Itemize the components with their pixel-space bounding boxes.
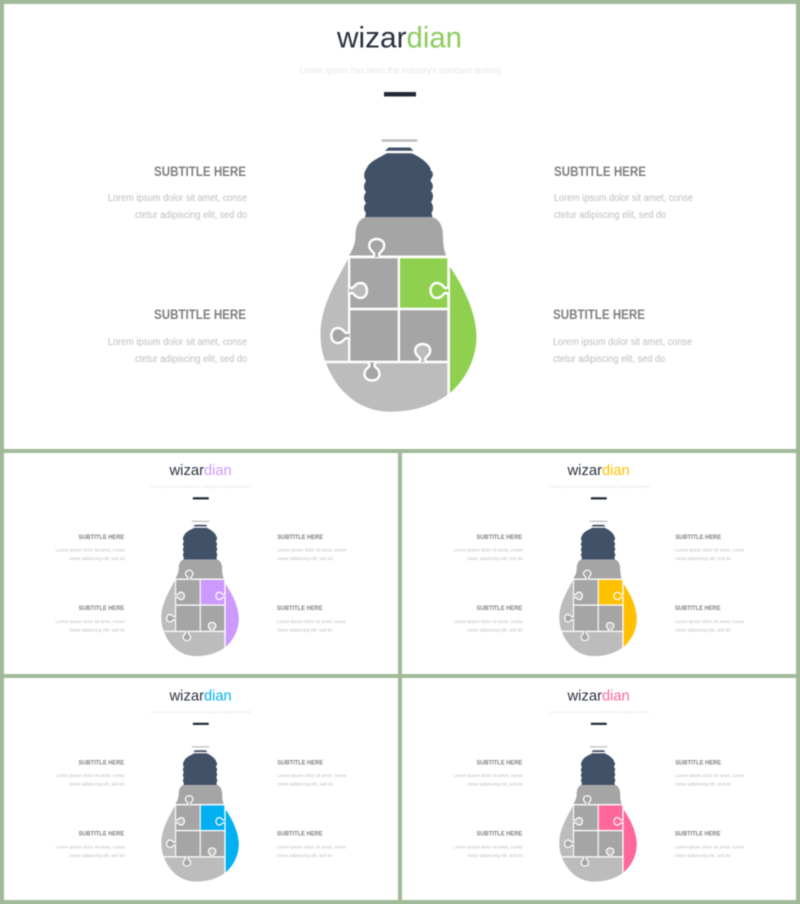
purple text blocks: ctetur adipiscing elit, sed do xyxy=(69,556,125,562)
amber text blocks: SUBTITLE HERE xyxy=(477,605,523,612)
text block: lower left: Lorem ipsum dolor sit amet, conse xyxy=(108,337,247,348)
purple text blocks: ctetur adipiscing elit, sed do xyxy=(277,627,333,633)
puzzle knob: lower right cell xyxy=(415,344,430,362)
title xyxy=(336,22,462,54)
pink tagline: Lorem Ipsum has been the industry's standard dummy xyxy=(549,710,650,715)
blue title dash xyxy=(193,723,209,725)
pink text blocks: Lorem ipsum dolor sit amet, conse xyxy=(675,773,745,779)
pink text blocks: Lorem ipsum dolor sit amet, conse xyxy=(454,773,523,779)
pink text blocks: SUBTITLE HERE xyxy=(477,759,523,766)
pink text blocks: Lorem ipsum dolor sit amet, conse xyxy=(454,844,523,850)
panel: purple slide xyxy=(4,453,398,674)
pink text blocks: SUBTITLE HERE xyxy=(675,831,721,838)
blue text blocks: SUBTITLE HERE xyxy=(277,759,324,766)
amber text blocks xyxy=(454,534,745,633)
pink text blocks: ctetur adipiscing elit, sed do xyxy=(467,853,523,859)
amber title: dian xyxy=(602,463,630,479)
panel: pink slide xyxy=(402,678,796,900)
puzzle knob: top xyxy=(369,239,384,257)
bulb cap tip xyxy=(385,148,414,151)
pink title xyxy=(566,689,630,705)
text block: lower left: SUBTITLE HERE xyxy=(154,307,246,322)
purple text blocks: SUBTITLE HERE xyxy=(277,534,324,541)
cell: bottom left xyxy=(350,310,398,361)
amber text blocks: Lorem ipsum dolor sit amet, conse xyxy=(454,619,523,625)
purple text blocks: Lorem ipsum dolor sit amet, conse xyxy=(277,547,347,553)
icon: puzzle light bulb xyxy=(320,139,476,412)
amber text blocks: ctetur adipiscing elit, sed do xyxy=(675,556,731,562)
purple tagline: Lorem Ipsum has been the industry's standard dummy xyxy=(151,484,252,489)
text block: upper right: SUBTITLE HERE xyxy=(554,164,646,179)
text block: lower right: Lorem ipsum dolor sit amet, conse xyxy=(553,337,692,348)
title dash xyxy=(384,92,416,96)
icon: amber puzzle bulb xyxy=(559,521,637,656)
cell: top right accent xyxy=(400,258,447,308)
pink title dash xyxy=(591,723,607,725)
blue text blocks: Lorem ipsum dolor sit amet, conse xyxy=(56,844,125,850)
amber text blocks: Lorem ipsum dolor sit amet, conse xyxy=(675,547,745,553)
pink text blocks: ctetur adipiscing elit, sed do xyxy=(675,853,731,859)
text block: lower right: ctetur adipiscing elit, sed do xyxy=(553,354,665,365)
purple text blocks xyxy=(56,534,347,633)
amber text blocks: ctetur adipiscing elit, sed do xyxy=(675,627,731,633)
amber text blocks: SUBTITLE HERE xyxy=(675,605,721,612)
blue text blocks: ctetur adipiscing elit, sed do xyxy=(69,853,125,859)
bulb screw base xyxy=(364,153,433,217)
panel: blue slide xyxy=(4,678,398,900)
pink text blocks xyxy=(454,759,745,859)
purple title dash xyxy=(193,497,209,499)
amber title: wizar xyxy=(566,463,602,479)
blue title: dian xyxy=(204,689,232,705)
puzzle knob: upper left cell xyxy=(349,283,367,298)
amber text blocks: Lorem ipsum dolor sit amet, conse xyxy=(454,547,523,553)
purple title: wizar xyxy=(168,463,204,479)
pink text blocks: Lorem ipsum dolor sit amet, conse xyxy=(675,844,744,850)
text block: lower left: ctetur adipiscing elit, sed do xyxy=(135,354,247,365)
purple text blocks: ctetur adipiscing elit, sed do xyxy=(69,627,125,633)
text block: upper left: Lorem ipsum dolor sit amet, conse xyxy=(108,193,247,204)
icon: blue puzzle bulb xyxy=(161,746,239,882)
cell: bottom right xyxy=(400,310,447,361)
bottom puzzle piece xyxy=(326,363,447,412)
text block: upper right: ctetur adipiscing elit, sed do xyxy=(554,210,666,221)
blue text blocks: Lorem ipsum dolor sit amet, conse xyxy=(277,773,347,779)
blue text blocks: ctetur adipiscing elit, sed do xyxy=(69,781,125,787)
panel: amber slide xyxy=(402,453,796,674)
purple title xyxy=(168,463,232,479)
amber text blocks: ctetur adipiscing elit, sed do xyxy=(467,627,523,633)
title: dian xyxy=(406,22,462,54)
blue title xyxy=(168,689,232,705)
blue tagline: Lorem Ipsum has been the industry's standard dummy xyxy=(151,710,252,715)
text block: lower right xyxy=(553,307,692,365)
pink text blocks: ctetur adipiscing elit, sed do xyxy=(675,781,731,787)
amber text blocks: ctetur adipiscing elit, sed do xyxy=(467,556,523,562)
cell: top left xyxy=(350,258,398,308)
title: wizar xyxy=(336,22,406,54)
blue title: wizar xyxy=(168,689,204,705)
amber tagline: Lorem Ipsum has been the industry's standard dummy xyxy=(549,484,650,489)
text block: upper right xyxy=(554,164,693,221)
amber title dash xyxy=(591,497,607,499)
left puzzle piece xyxy=(320,259,348,361)
amber text blocks: Lorem ipsum dolor sit amet, conse xyxy=(675,619,744,625)
blue text blocks: SUBTITLE HERE xyxy=(277,831,323,838)
text block: upper right: Lorem ipsum dolor sit amet, conse xyxy=(554,193,693,204)
puzzle knob: bottom piece xyxy=(364,362,380,380)
pink text blocks: SUBTITLE HERE xyxy=(477,831,523,838)
blue text blocks xyxy=(56,759,347,859)
pink title: dian xyxy=(602,689,630,705)
text block: upper left: SUBTITLE HERE xyxy=(154,164,246,179)
pink text blocks: SUBTITLE HERE xyxy=(675,759,722,766)
purple text blocks: ctetur adipiscing elit, sed do xyxy=(277,556,333,562)
purple text blocks: Lorem ipsum dolor sit amet, conse xyxy=(277,619,346,625)
purple text blocks: SUBTITLE HERE xyxy=(79,605,125,612)
blue text blocks: Lorem ipsum dolor sit amet, conse xyxy=(56,773,125,779)
amber title xyxy=(566,463,630,479)
text block: lower left xyxy=(108,307,247,365)
purple text blocks: SUBTITLE HERE xyxy=(79,534,125,541)
tagline: Lorem Ipsum has been the industry's standard dummy xyxy=(300,66,502,76)
blue text blocks: SUBTITLE HERE xyxy=(79,759,125,766)
pink title: wizar xyxy=(566,689,602,705)
purple text blocks: Lorem ipsum dolor sit amet, conse xyxy=(56,547,125,553)
blue text blocks: ctetur adipiscing elit, sed do xyxy=(277,781,333,787)
text block: lower right: SUBTITLE HERE xyxy=(553,307,645,322)
amber text blocks: SUBTITLE HERE xyxy=(477,534,523,541)
right accent piece xyxy=(450,267,476,393)
panel: main green slide xyxy=(4,4,796,449)
amber text blocks: SUBTITLE HERE xyxy=(675,534,722,541)
blue text blocks: SUBTITLE HERE xyxy=(79,831,125,838)
bulb neck piece xyxy=(349,218,446,256)
blue text blocks: Lorem ipsum dolor sit amet, conse xyxy=(277,844,346,850)
text block: upper left: ctetur adipiscing elit, sed do xyxy=(135,210,247,221)
puzzle knob: accent cell xyxy=(430,283,448,298)
icon: purple puzzle bulb xyxy=(161,521,239,656)
text block: upper left xyxy=(108,164,247,221)
puzzle knob: left piece xyxy=(331,328,349,343)
purple text blocks: Lorem ipsum dolor sit amet, conse xyxy=(56,619,125,625)
pink text blocks: ctetur adipiscing elit, sed do xyxy=(467,781,523,787)
bulb top bar xyxy=(382,139,417,142)
purple title: dian xyxy=(204,463,232,479)
blue text blocks: ctetur adipiscing elit, sed do xyxy=(277,853,333,859)
purple text blocks: SUBTITLE HERE xyxy=(277,605,323,612)
icon: pink puzzle bulb xyxy=(559,746,637,882)
